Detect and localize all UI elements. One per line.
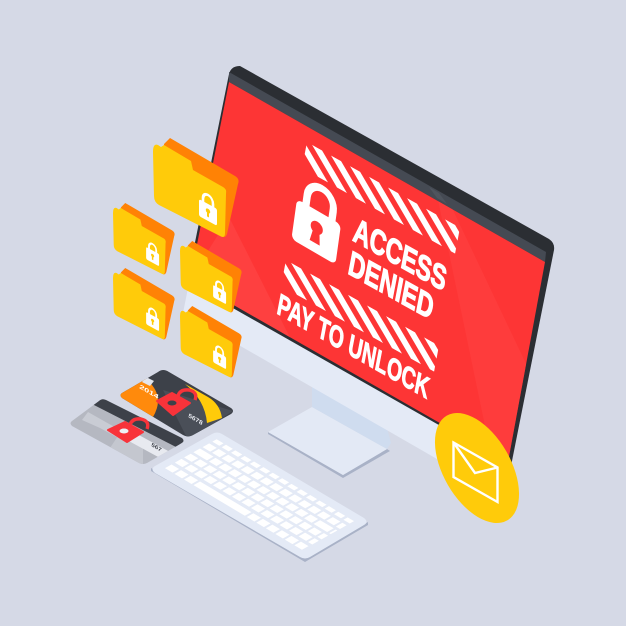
card padlock <box>108 419 148 442</box>
screen reflections <box>190 200 530 470</box>
monitor chin <box>183 278 512 464</box>
warning stripes: lower band <box>284 263 438 372</box>
monitor bezel <box>187 66 554 466</box>
folder: small left lower <box>113 268 175 339</box>
keyboard <box>151 432 368 562</box>
keys <box>168 440 352 548</box>
envelope icon <box>454 442 498 502</box>
card padlock <box>157 390 196 415</box>
monitor <box>183 66 554 470</box>
folder: small top left <box>113 203 175 274</box>
card number: 2014 <box>138 384 160 401</box>
credit card: front <box>120 370 233 436</box>
folder: small right upper <box>180 241 242 312</box>
lock icon <box>199 190 217 226</box>
warning stripes: top band <box>304 145 460 254</box>
denied text: DENIED <box>346 243 437 327</box>
bezel top strip <box>229 72 546 262</box>
pay to unlock text: PAY TO UNLOCK <box>275 286 432 406</box>
email badge <box>418 399 536 537</box>
folder: large <box>153 138 239 237</box>
monitor stand <box>268 380 391 478</box>
credit card: back <box>70 399 184 464</box>
red screen <box>190 82 545 462</box>
card digits: 5678 <box>187 413 204 427</box>
card security code: 567 <box>150 442 162 454</box>
padlock on screen <box>291 176 344 265</box>
access denied text: ACCESS <box>351 210 450 299</box>
folder: small right lower <box>180 306 242 377</box>
